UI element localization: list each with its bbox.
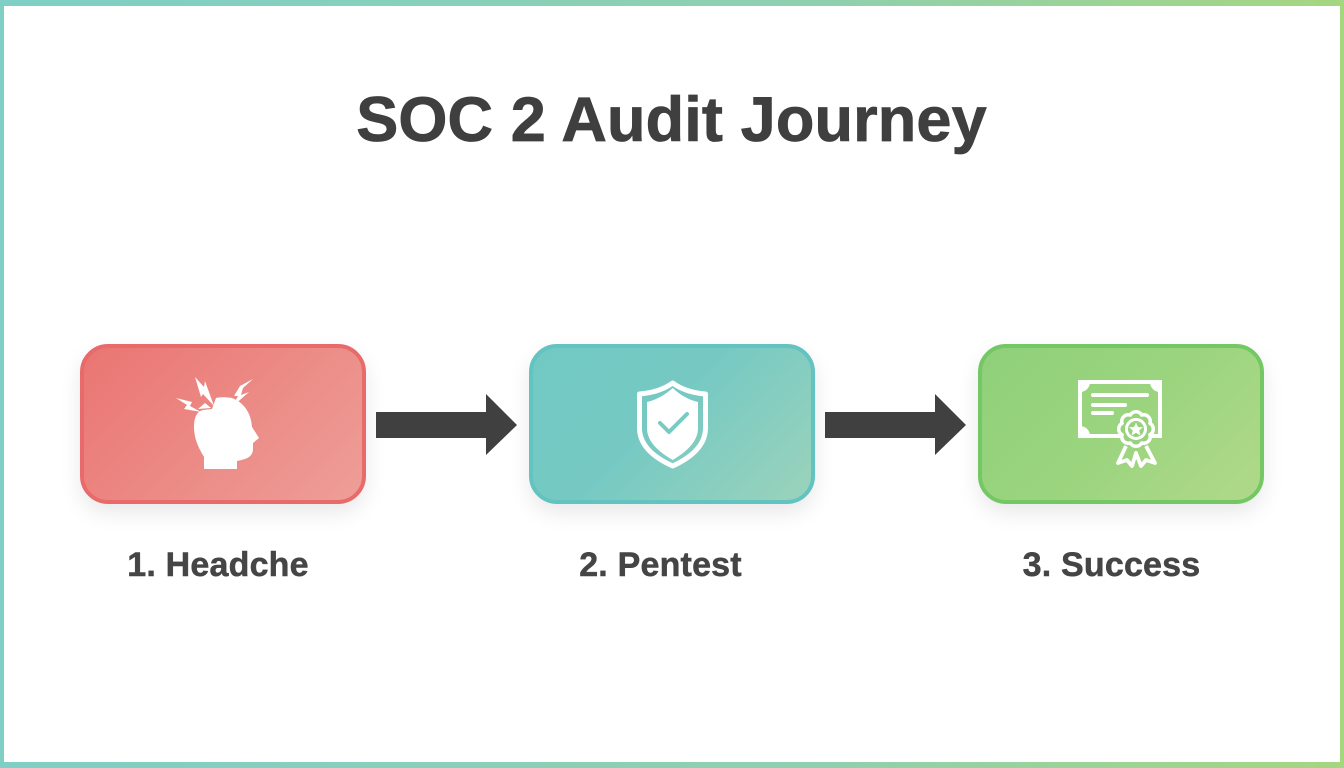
label: step 1: 1. Headche (127, 546, 309, 584)
panel: success step card (978, 344, 1264, 504)
icon: certificate with ribbon (1078, 380, 1162, 468)
arrow: pentest to success (825, 394, 966, 455)
arrow: headache to pentest (376, 394, 517, 455)
panel: headache step card (80, 344, 366, 504)
label: step 3: 3. Success (1023, 546, 1200, 584)
title: SOC 2 Audit Journey (356, 85, 987, 155)
icon: shield with check (637, 380, 708, 468)
panel: pentest step card (529, 344, 815, 504)
icon: head with lightning bolts (176, 377, 259, 469)
label: step 2: 2. Pentest (579, 546, 742, 584)
